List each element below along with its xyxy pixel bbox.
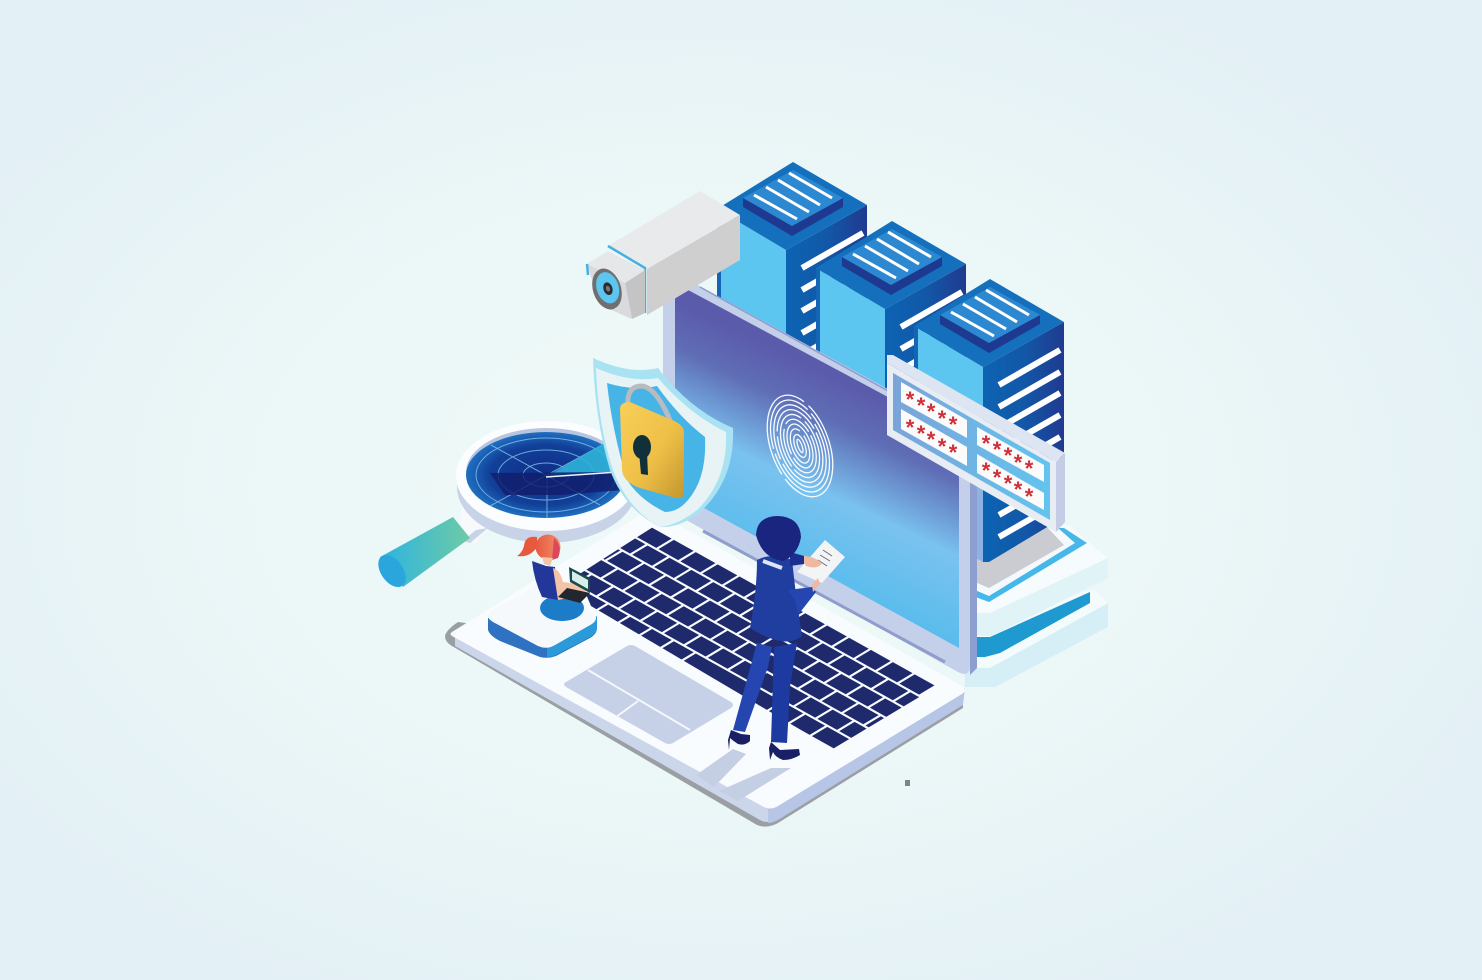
password asterisks: * [906,415,915,440]
password asterisks: * [1025,456,1034,481]
password asterisks: * [993,465,1002,490]
magnifying glass [373,421,638,592]
password asterisks: * [927,399,936,424]
password asterisks: * [906,387,915,412]
password asterisks: * [938,406,947,431]
magnifier handle [373,505,496,592]
radar screen [466,432,626,518]
server tower 2 [816,221,966,504]
password asterisks [906,387,1034,509]
password asterisks: * [938,434,947,459]
server tower 3 [914,279,1064,562]
small platform [488,586,597,658]
shield [593,358,733,527]
password asterisks: * [1025,484,1034,509]
password asterisks: * [982,431,991,456]
password asterisks: * [993,437,1002,462]
password asterisks: * [1004,443,1013,468]
password asterisks: * [1004,471,1013,496]
password asterisks: * [917,421,926,446]
password asterisks: * [949,412,958,437]
server tower 1 [717,162,867,445]
padlock [620,386,684,498]
trackpad [564,645,733,744]
security camera [587,191,740,319]
small artifact mark [905,780,910,786]
document [797,540,845,583]
laptop screen [663,266,977,675]
password asterisks: * [927,427,936,452]
password asterisks: * [917,393,926,418]
password asterisks: * [1014,477,1023,502]
keyboard [557,532,929,744]
seated woman with tablet [517,534,590,621]
illustration canvas [234,162,1187,827]
password asterisks: * [1014,450,1023,475]
password asterisks: * [949,440,958,465]
keyhole [633,435,651,475]
password panel [887,355,1065,532]
laptop base [445,510,965,827]
ponytail hair [517,537,537,556]
server platform [965,525,1108,687]
password asterisks: * [982,458,991,483]
camera lens [587,265,627,313]
standing woman in suit [728,516,845,760]
icon: fingerprint [755,386,845,506]
